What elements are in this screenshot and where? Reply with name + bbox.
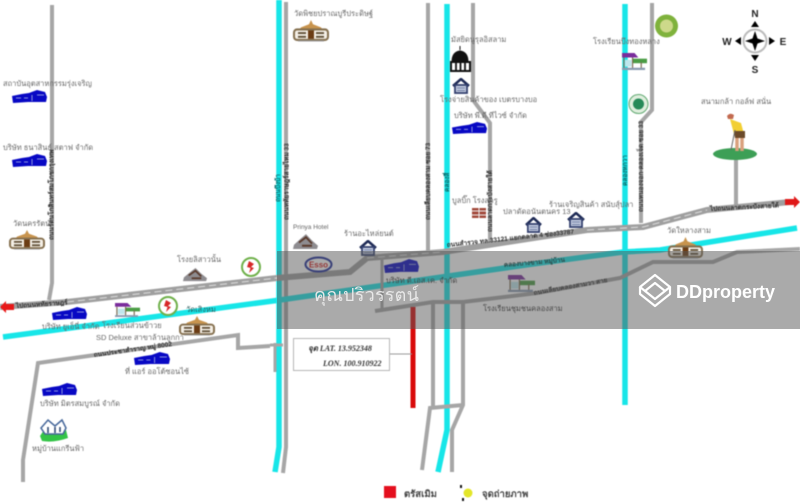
label: factory 1: สถาบันอุตสาหกรรมรุ่งเจริญ <box>3 79 92 88</box>
label: factory 2: บริษัท ธนาสินธ์ สตาฟ จำกัด <box>3 143 93 152</box>
road: cyan vertical east <box>622 4 628 405</box>
road: site plot <box>410 307 416 408</box>
legend: จุดถ่ายภาพ <box>482 489 528 500</box>
watermark: agent name: คุณปริวรรตน์ <box>314 285 419 306</box>
icon: factory 3 <box>452 122 487 134</box>
road label: lower east: ถนนเลียบคลองสามวา สาย <box>533 276 608 297</box>
icon: factory band <box>384 259 419 273</box>
compass <box>722 9 787 76</box>
road: gray vertical with bend <box>473 3 490 243</box>
compass: W <box>722 37 732 48</box>
label: temple east: วัดใหลางสาม <box>667 226 711 235</box>
road label: vertical center gray: ถนนเลียบคลองสาม ซอย 73 <box>424 142 432 220</box>
road: site access <box>380 258 384 310</box>
road: lower main <box>23 335 270 482</box>
legend: ตรัสเมิม <box>404 489 437 500</box>
icon: resort <box>183 268 207 281</box>
icon: Esso <box>306 258 332 272</box>
icon: ptt 2 <box>159 297 177 315</box>
label: factory 5: ที่ แอร์ ออโต้ซอนไซ้ <box>125 366 189 376</box>
label: village: หมู่บ้านแกรีนฟ้า <box>32 444 84 453</box>
label: property 2: ร้านเจริญสินค้า สนับสุ์ปลา <box>549 200 633 209</box>
icon: temple east <box>669 237 702 258</box>
label: school: โรงเรียนบึงทองหลาง <box>593 37 660 46</box>
road: gray vertical west <box>283 2 286 473</box>
icon: ptt 1 <box>242 258 260 276</box>
road: south branches <box>422 302 463 472</box>
road label: vertical east: ถนนหนองจอก-คลองเจ็ด ซอย 33 <box>636 121 645 212</box>
label: temple south: วัดเสิงหม <box>186 305 216 314</box>
icon: house 4 <box>360 241 376 255</box>
icon: factory 1 <box>12 90 47 103</box>
road label: vertical center cyan: คลองสี่ <box>441 173 451 192</box>
icon: brick shop <box>472 208 486 218</box>
road: cyan vertical west <box>275 0 279 472</box>
label: temple 1: วัดนครรัตน์ <box>13 219 50 228</box>
label: house 4: ร้านอะไหล่ยนต์ <box>344 229 394 238</box>
icon: station band <box>508 275 535 291</box>
road: stub west <box>270 343 283 372</box>
road label: vertical west cyan: ถนนบึงบ้า <box>273 174 282 202</box>
road: lower main east <box>375 249 800 311</box>
road: upper main <box>0 202 790 307</box>
label: SD Deluxe: SD Deluxe สาขาล้านลูกกา <box>96 333 184 342</box>
icon: station west <box>115 303 140 316</box>
label: mosque: มัสยิดนูรุลอิสลาม <box>451 35 506 44</box>
road label: upper main: ถนนสำรวจ ทล.33121 แยกตลาด 4 ช่อง33787 <box>446 228 575 249</box>
road: left vertical <box>49 5 52 300</box>
watermark band <box>277 251 800 329</box>
road label: vertical east cyan: คลองหกวา <box>622 155 629 186</box>
road: golf connector <box>734 157 738 205</box>
icon: hotel <box>293 234 318 249</box>
icon: factory 6 <box>42 383 77 396</box>
icon: factory 2 <box>12 154 47 167</box>
compass: S <box>752 65 759 76</box>
road label: vertical west gray: ถนนหทัยราษฎร์สายไหม 33 <box>282 143 290 220</box>
legend <box>384 485 528 501</box>
road: cyan vertical center <box>438 4 447 472</box>
road label: west arrow: ไปถนนหทัยราษฎร์ <box>15 297 68 310</box>
road label: vertical left: ถนนรัตนโกสินทร์สมโภชกรุงเทพ <box>46 150 56 240</box>
icon: factory 4 <box>52 307 87 320</box>
road label: lower main: ถนนประชาสำราญ หมู่ 8002 <box>93 340 173 360</box>
watermark: DDproperty logo: DDproperty <box>676 282 775 302</box>
compass: N <box>751 9 759 20</box>
icon: medallion north <box>655 14 678 38</box>
coordinates callout: LON. 100.910922 <box>322 359 381 368</box>
label: factory 4: บริษัท ยูเอ็นี่ จำกัด <box>42 321 100 331</box>
icon: mosque <box>451 46 470 71</box>
label: temple 2: วัดพิชยปราณบูรีประดิษฐ์ <box>294 9 373 18</box>
label: factory band: บริษัท ดี.เอส.เค. จำกัด <box>386 276 457 285</box>
label: factory 6: บริษัท มิตรสมบูรณ์ จำกัด <box>40 399 120 408</box>
watermark: DDproperty logo <box>640 275 775 306</box>
icon: station north <box>622 53 647 69</box>
coordinates callout <box>294 338 412 370</box>
icon: temple 2 <box>294 20 328 41</box>
icon: village <box>40 420 68 442</box>
label: factory 3: บริษัท พี.ดี.ทีไวซ์ จำกัด <box>454 111 527 120</box>
road: gray vertical center upper <box>426 3 430 252</box>
label: brick shop: บูลบิ๊ก โรงสกรู <box>452 195 498 205</box>
label: house shop: โรงจ่ายสินค้าของ เบตรบางบอ <box>440 95 537 104</box>
road label: east arrow: ไปถนนลาดกระบังสายใต้ <box>709 200 779 213</box>
icon: house 3 <box>568 213 584 227</box>
label: station west: โรงเรียนส่วนข้าวย <box>102 321 162 330</box>
road: gray vertical east <box>641 3 652 223</box>
coordinates callout: จุด LAT. 13.952348 <box>308 344 372 354</box>
arrow: west <box>0 301 14 313</box>
compass: E <box>780 37 787 48</box>
label: resort: โรงยลิสาวนั้น <box>177 254 221 264</box>
arrow: east <box>785 196 800 208</box>
icon: temple south <box>180 316 214 335</box>
icon: temple 1 <box>10 230 44 249</box>
icon: factory 5 <box>134 352 170 365</box>
label: band east: โรงเรียนชุมชนคลองสาม <box>483 304 563 313</box>
icon: house shop <box>453 79 469 93</box>
label: property 1: ปลาดัดอนันตนคร 13 <box>503 207 571 216</box>
road label: vertical bend: ถนนลาดกระบังสายใต้ <box>485 170 494 232</box>
road label: cyan main: คลองบางขาม หมู่บ้าน <box>503 255 566 270</box>
icon: Esso: Esso <box>309 260 328 270</box>
label: hotel: Prinya Hotel <box>293 224 329 231</box>
label: golf: สนามกล้า กอล์ฟ สนั่น <box>701 96 771 106</box>
icon: house 2 <box>526 218 541 232</box>
icon: medallion south <box>629 94 648 114</box>
icon: golfer <box>713 114 757 160</box>
road: cyan diagonal <box>3 228 797 337</box>
